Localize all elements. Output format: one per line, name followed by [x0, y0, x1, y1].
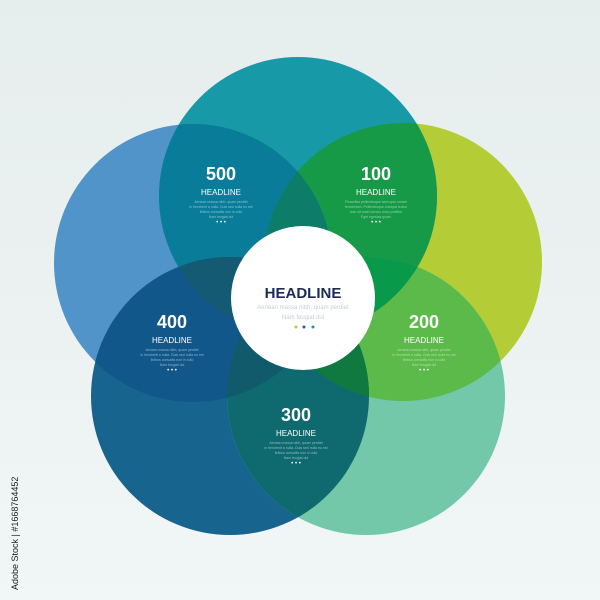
label: 300: 300: [281, 405, 311, 425]
label: 100: fermentum. Pellentesque volutpat lectus: [345, 205, 407, 209]
circle: top teal: [159, 57, 437, 335]
overlap: 400: [95, 257, 241, 402]
label: 500: in hendrerit a nulla. Duis sed nulla eu est: [189, 205, 253, 209]
center circle: [231, 226, 375, 370]
label: 100: cum sit amet cursus nunc porttitor: [350, 210, 403, 214]
label: 200: [392, 312, 456, 374]
overlap: 300: [227, 344, 369, 518]
center headline: HEADLINE: [265, 285, 341, 302]
label: 300: in hendrerit a nulla. Duis sed nulla eu est: [264, 446, 328, 450]
label: 100: • • •: [371, 220, 381, 226]
overlap: 200: [358, 257, 500, 401]
stock id vertical text: Adobe Stock | #1668764452: [10, 477, 20, 590]
label: 300: Nam feugiat dui: [284, 456, 308, 460]
label: 500: • • •: [216, 220, 226, 226]
label: 500: [189, 164, 253, 226]
label: 500: HEADLINE: [201, 188, 241, 197]
circle: left blue: [54, 124, 332, 402]
label: 100: Phasellus pellentesque sem quis ornare: [345, 200, 407, 204]
label: 300: finibus convallis non in odio: [275, 451, 317, 455]
label: 100: Eget egestas quam: [361, 215, 391, 219]
label: 400: Aenean massa nibh, quam perdiet: [145, 348, 199, 352]
label: 500: Aenean massa nibh, quam perdiet: [194, 200, 248, 204]
label: 300: HEADLINE: [276, 429, 316, 438]
label: 200: Aenean massa nibh, quam perdiet: [397, 348, 451, 352]
label: 300: • • •: [291, 461, 301, 467]
label: 200: • • •: [419, 368, 429, 374]
label: 400: [140, 312, 204, 374]
label: 100: [345, 164, 407, 226]
circle: right lime: [264, 123, 542, 401]
label: 400: Nam feugiat dui: [160, 363, 184, 367]
center body text: Aenean massa nibh, quam perdiet: [257, 305, 349, 311]
label: 500: Nam feugiat dui: [209, 215, 233, 219]
overlap: 500: [159, 124, 298, 267]
label: 200: HEADLINE: [404, 336, 444, 345]
label: 400: 400: [157, 312, 187, 332]
center dots: [294, 326, 314, 328]
label: 400: HEADLINE: [152, 336, 192, 345]
overlap: triple dark regions: [178, 172, 418, 398]
circle: bottom-left dark blue: [91, 257, 369, 535]
label: 400: finibus convallis non in odio: [151, 358, 193, 362]
overlap: 100: [266, 123, 437, 267]
circle: bottom-right mint: [227, 257, 505, 535]
label: 100: 100: [361, 164, 391, 184]
label: 400: in hendrerit a nulla. Duis sed nulla eu est: [140, 353, 204, 357]
center circle: Nam feugiat dui: [282, 315, 324, 321]
label: 300: [264, 405, 328, 467]
label: 300: Aenean massa nibh, quam perdiet: [269, 441, 323, 445]
label: 500: finibus convallis non in odio: [200, 210, 242, 214]
label: 100: HEADLINE: [356, 188, 396, 197]
label: 500: 500: [206, 164, 236, 184]
label: 400: • • •: [167, 368, 177, 374]
label: 200: Nam feugiat dui: [412, 363, 436, 367]
label: 200: in hendrerit a nulla. Duis sed nulla eu est: [392, 353, 456, 357]
label: 200: finibus convallis non in odio: [403, 358, 445, 362]
label: 200: 200: [409, 312, 439, 332]
